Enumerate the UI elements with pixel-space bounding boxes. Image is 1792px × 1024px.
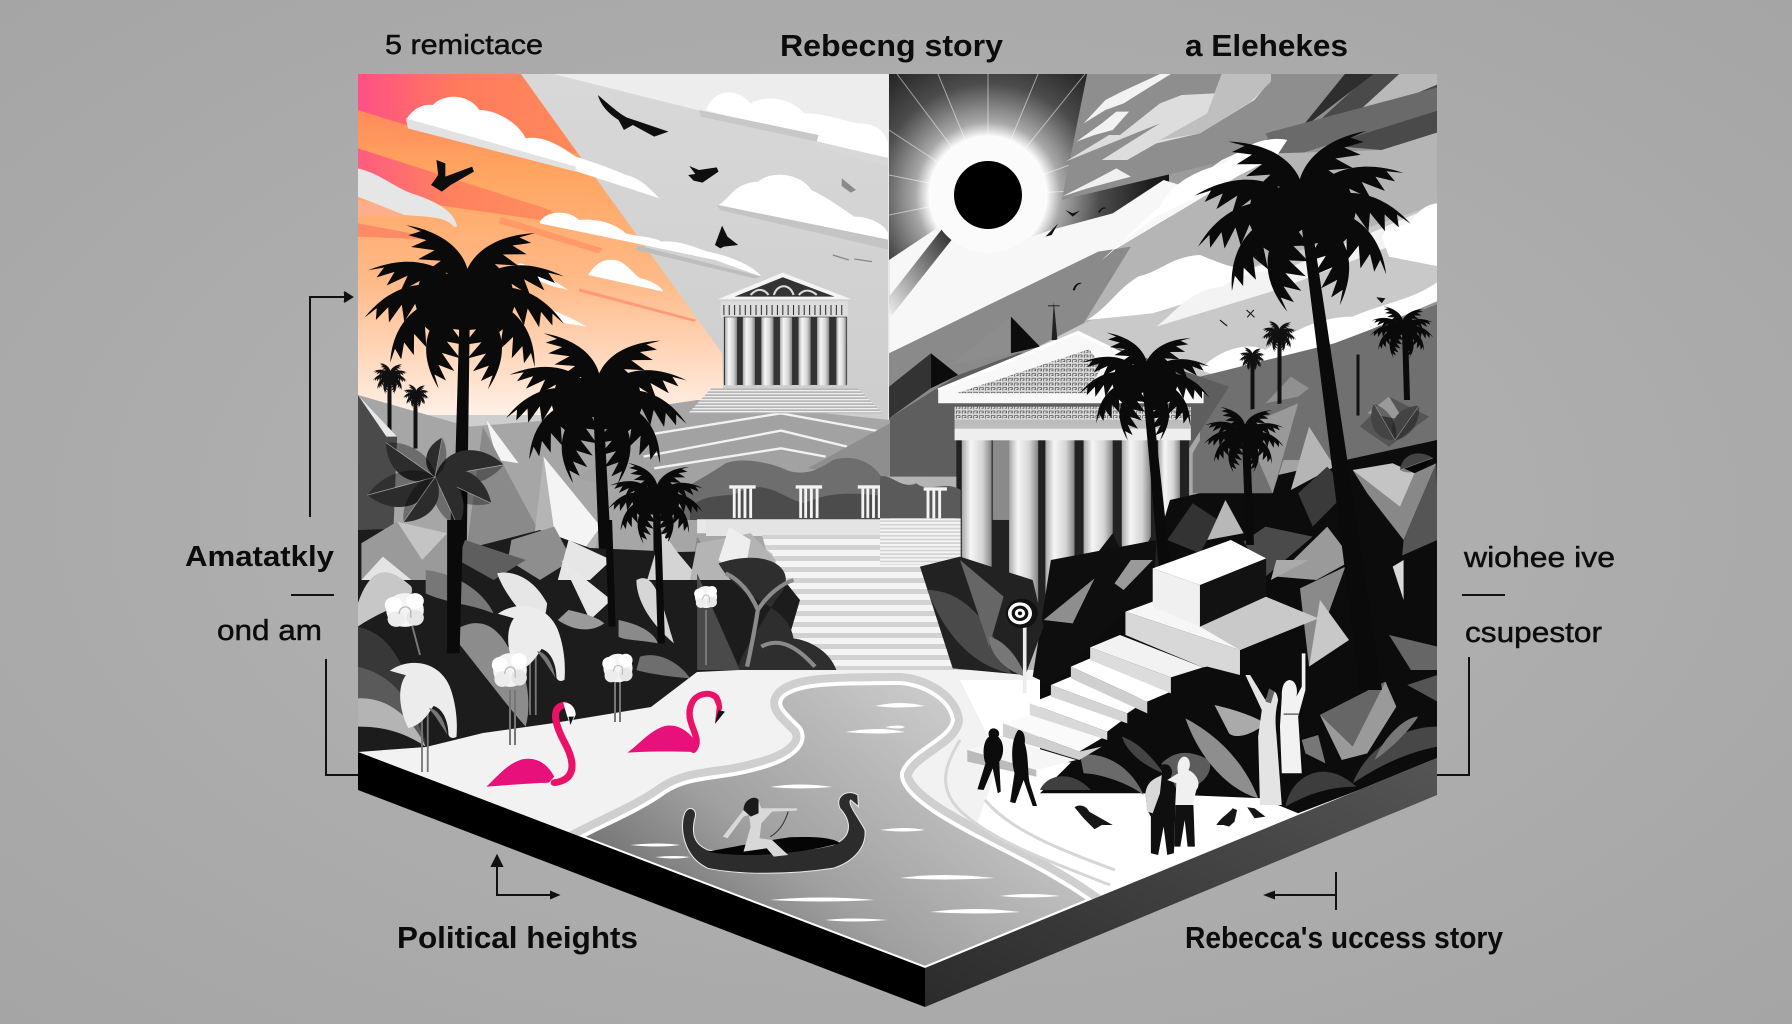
far bushes	[679, 458, 890, 520]
rocks above foreground leaves	[361, 522, 776, 580]
central stairway	[706, 533, 958, 670]
white cranes and rose blooms	[385, 586, 717, 772]
distant birds	[1045, 207, 1385, 326]
label: right upper: wiohee ive	[1463, 542, 1615, 574]
panel: right sky	[880, 73, 1440, 674]
icon: small bird	[715, 226, 738, 248]
icon: eclipsed sun	[942, 161, 1022, 240]
rose bloom	[602, 654, 633, 722]
side face: left wall	[358, 752, 925, 1007]
flamingo: left	[486, 703, 576, 787]
diorama scene	[358, 73, 1440, 974]
icon: bird over sunset	[431, 160, 474, 192]
people: women in white robes	[1245, 653, 1305, 805]
leaves near sign	[927, 590, 1011, 673]
people: couple	[1145, 757, 1199, 855]
left divider dash	[291, 594, 334, 596]
people: pair in black	[977, 728, 1037, 806]
rose bloom	[492, 653, 527, 745]
icon: large bird	[598, 95, 669, 137]
river	[581, 683, 1115, 968]
sun rays	[889, 74, 1086, 216]
fore leaves	[1040, 776, 1091, 790]
icon: small bird	[688, 166, 719, 183]
arrow: political heights	[492, 856, 558, 898]
rower	[723, 798, 797, 857]
ground: shore	[359, 670, 1039, 832]
mid ground: far hills and distant temple	[358, 273, 890, 580]
temple: large foreground	[880, 333, 1204, 640]
heading: top right: a Elehekes	[1185, 28, 1348, 63]
dark rocks below temple	[1033, 540, 1156, 685]
label: rebecca's story: Rebecca's uccess story	[1185, 920, 1504, 955]
palm: far right	[1370, 302, 1434, 400]
palm: large left	[364, 225, 564, 545]
palm: small behind rocks	[1204, 402, 1284, 545]
arrow: rebecca's story	[1266, 872, 1336, 910]
icon: signpost	[1006, 599, 1038, 693]
boat hull	[682, 793, 865, 873]
stairs	[967, 540, 1318, 777]
small columned pavilions	[729, 485, 884, 518]
label: right lower: csupestor	[1465, 617, 1602, 649]
panel: left sky	[358, 73, 890, 440]
foliage: left foreground	[358, 520, 836, 752]
palm: tallest right	[1182, 104, 1423, 690]
flamingo: right	[627, 693, 725, 753]
palm: second left	[506, 333, 686, 549]
sun beam	[890, 230, 952, 316]
label: left lower: ond am	[217, 615, 322, 647]
side face: right wall	[925, 758, 1437, 1007]
palm: third left	[608, 463, 702, 551]
arrow: left lower	[326, 659, 358, 775]
boat with rower	[682, 793, 865, 873]
heading: centre title: Rebecng story	[780, 28, 1004, 63]
palm: small dark with broad leaves	[367, 438, 504, 522]
right divider dash	[1462, 594, 1505, 596]
arrow: left upper	[310, 292, 352, 517]
palm: temple foreground	[1079, 324, 1211, 580]
dark bush near stairs	[920, 557, 1044, 675]
rose bloom	[385, 593, 424, 655]
far palms	[373, 319, 1359, 448]
label: political heights: Political heights	[397, 920, 638, 955]
dark foreground rock mass	[1040, 540, 1437, 813]
icon: crows	[1075, 806, 1265, 829]
far-left rocks and foliage	[358, 396, 776, 564]
rose bloom	[694, 586, 717, 665]
label: left upper: Amatatkly	[185, 541, 334, 573]
temple: distant	[688, 273, 883, 413]
pyramids	[951, 317, 1011, 365]
heading: top left: 5 remictace	[385, 29, 543, 60]
foliage and rocks: right side	[1040, 388, 1440, 770]
steps and foreground: lower right	[920, 540, 1437, 855]
flamingos	[486, 693, 725, 787]
arrow: right lower	[1437, 657, 1469, 775]
